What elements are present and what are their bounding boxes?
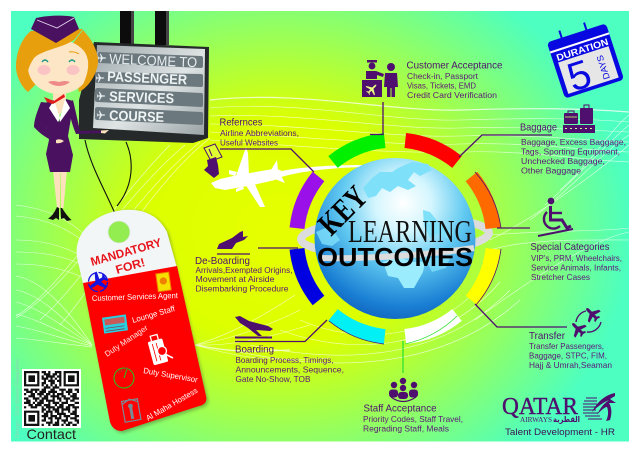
qatar airways logo [502,393,616,437]
boarding text: Boarding Process, Timings, [236,355,334,365]
hat [31,16,79,43]
shoes [48,207,72,221]
baggage text: Tags, Sporting Equipment, [521,146,620,156]
learning: LEARNING [348,213,472,249]
board screen [93,45,205,135]
connector: baggage [459,135,552,157]
customer acceptance text: Visas, Tickets, EMD [407,80,476,90]
lounge staff: Lounge Staff [131,304,177,325]
special categories text: Service Animals, Infants, [531,262,621,272]
white collar [49,99,70,122]
icon: customer acceptance [362,60,398,97]
special categories text: VIP's, PRM, Wheelchairs, [531,253,622,263]
icon: baggage [563,105,595,133]
segment: references purple [297,176,318,228]
continents [316,162,453,288]
segment: boarding cyan [333,315,385,336]
baggage text: Unchecked Baggage, [521,156,605,166]
icon: boarding plane [235,316,273,338]
connector: transfer [475,304,567,327]
designer credit: Design : Don Binara Rajapakse [15,359,21,438]
special categories text [530,241,622,282]
airways wordmark: AIRWAYS [520,415,552,424]
customer services agent: Customer Services Agent [92,291,179,303]
boarding text: Gate No-Show, TOB [236,374,311,384]
connector: special categories [497,227,530,229]
icon: hand holding card [204,144,222,178]
row: course: COURSE [109,107,164,125]
tag cords [85,140,131,218]
references text: Airline Abbreviations, [220,128,299,138]
five: 5 [562,52,597,100]
calendar page [558,46,619,94]
icon: wheelchair [538,198,573,236]
boarding text: Boarding [235,344,274,356]
qr code [22,369,81,428]
board hanging straps [120,11,169,45]
row: passenger: PASSENGER [107,68,187,87]
flight attendant [16,16,109,221]
contact label: Contact [26,426,76,442]
duty supervisor: Duty Supervisor [143,366,199,385]
transfer text: Transfer [529,330,565,342]
mandatory heading: MANDATORY [89,235,163,269]
connector: references [220,149,314,172]
key: KEY [310,178,374,242]
hair bang [16,29,98,92]
jacket and skirt [41,99,73,172]
segment: special orange [472,176,493,228]
references text [220,116,299,148]
eyes [42,60,75,62]
icon: luggage with magnifier [146,333,173,365]
tag hole [108,221,130,243]
transfer text [529,330,612,370]
baggage text: Baggage [520,122,557,134]
icon: de-boarding plane [217,231,250,254]
staff acceptance text: Staff Acceptance [364,402,437,414]
mandatory tag [77,210,208,433]
arabic wordmark: القطرية [553,415,580,424]
boarding text: Announcements, Sequence, [236,364,344,374]
ring segments [297,140,493,336]
mouth [48,81,70,86]
de-boarding text: Movement at Airside [196,274,275,284]
icon: passport [156,272,171,292]
neck [53,90,66,116]
icon: transfer [567,303,603,340]
duration: DURATION [555,37,610,64]
calendar stripe [550,32,609,53]
row: welcome to: WELCOME TO [109,51,198,70]
departure board sign [79,11,209,143]
duty manager: Duty Manager [103,323,150,359]
hat stripe [37,18,74,28]
references text: Refernces [220,116,262,128]
hands [56,130,109,143]
arms [34,100,101,143]
connector: staff acceptance [402,341,404,373]
special categories text: Special Categories [530,241,610,253]
tag body top [77,210,177,284]
mandatory heading: FOR! [114,255,147,277]
de-boarding text: Disembarking Procedure [196,284,289,294]
eyebrow [69,52,79,54]
de-boarding text: De-Boarding [195,255,250,267]
connector: customer acceptance [370,102,383,134]
icon: boarding card [102,314,128,334]
references text: Useful Websites [220,138,278,148]
staff acceptance text: Priority Codes, Staff Travel, [363,414,463,424]
board frame [79,42,209,143]
connector: de-boarding [258,247,298,249]
transfer text: Transfer Passengers, [529,341,604,351]
calendar badge: duration 5 days [545,16,626,103]
white plane with swoosh [211,147,362,207]
customer acceptance text [406,60,503,100]
icon: elevator [121,398,141,422]
calendar rings [559,21,593,43]
segment: staff white [405,315,457,336]
key learning outcomes title [310,178,473,272]
customer acceptance text: Check-in, Passport [407,71,479,81]
baggage text: Other Baggage [521,166,581,176]
background white line patterns [16,97,629,363]
de-boarding text [195,255,292,294]
al maha hostess: Al Maha Hostess [144,386,199,423]
red scarf [44,94,65,104]
baggage text [520,122,626,176]
outcomes: OUTCOMES [317,242,473,272]
special categories text: Stretcher Cases [531,272,590,282]
legs [53,170,67,208]
boarding text [235,344,344,384]
de-boarding text: Arrivals,Exempted Origins, [196,265,292,275]
connector: boarding [235,320,327,342]
tag shadow [79,211,208,433]
qatar wordmark: QATAR [502,394,578,420]
days: DAYS [595,54,612,81]
calendar body [547,23,624,99]
tag body red [83,266,206,431]
transfer text: Hajj & Umrah,Seaman [529,360,612,370]
segment: baggage red [405,140,457,162]
transfer text: Baggage, STPC, FIM, [529,350,607,360]
face [28,40,90,94]
saturn band front [320,248,474,258]
ring thin outlines [329,172,501,344]
customer acceptance text: Credit Card Verification [407,90,497,100]
baggage text: Baggage, Excess Baggage, [521,137,626,147]
cheeks [38,65,80,75]
staff acceptance text [363,402,463,434]
saturn band behind globe [300,215,490,257]
customer acceptance text: Customer Acceptance [406,60,503,72]
segment: deboarding blue [297,249,318,300]
icon: staff group [389,378,418,402]
icon: radar [114,368,134,388]
hair back [16,30,98,92]
segment: transfer yellow [472,249,493,300]
icon: plane in circle [85,269,111,295]
talent development: Talent Development - HR [505,427,616,437]
globe [314,158,476,319]
oryx emblem [583,393,616,421]
segment: customer acceptance green [333,140,385,162]
staff acceptance text: Regrading Staff, Meals [363,424,449,434]
row: services: SERVICES [109,88,174,106]
